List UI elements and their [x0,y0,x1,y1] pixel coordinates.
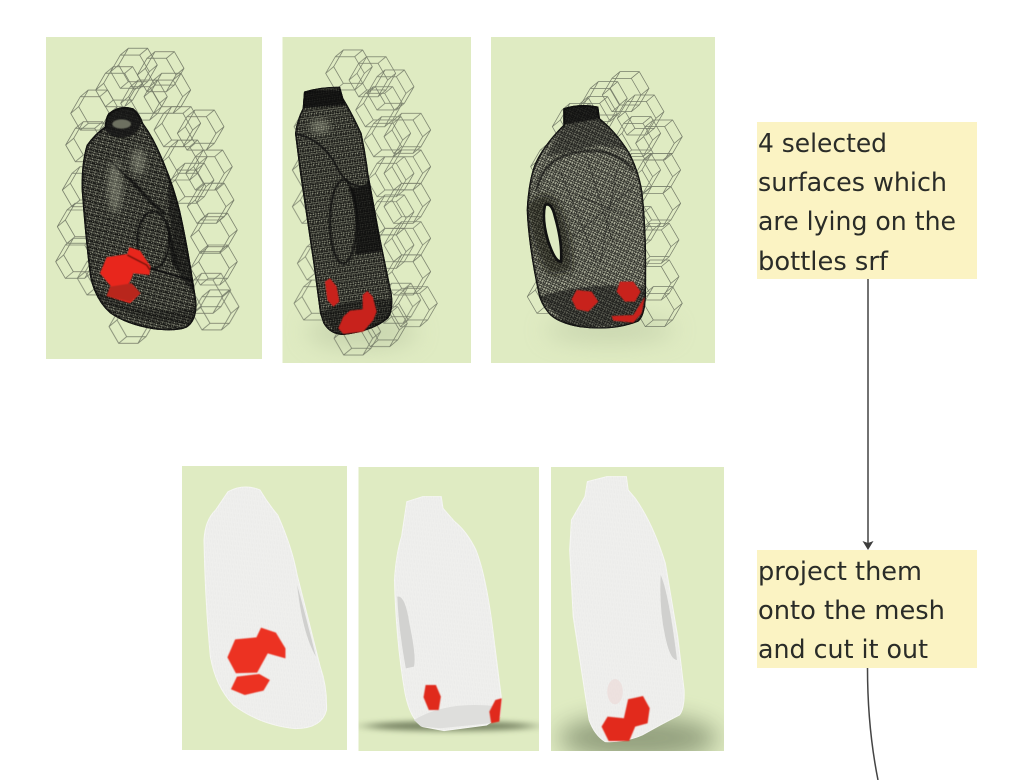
label: project and cut: and cut it out [758,635,928,665]
bottle 3 mesh [526,105,646,329]
wireframe: hexagon cells behind bottle 3 [527,72,682,327]
handle opening [544,204,561,262]
panel: cut mesh bottle, view 3 [551,467,724,760]
red selected surfaces, view 1 [100,247,151,303]
panel: cut mesh bottle, view 1 [182,466,347,750]
label: selected surfaces: are lying on the [758,207,956,237]
red cut-outs, view 2 [424,685,502,723]
red selected surfaces, view 3 [572,282,645,323]
label: project and cut: project them [758,557,922,587]
label: project and cut [757,550,977,668]
white mesh bottle 3 [570,477,684,742]
label: project and cut: onto the mesh [758,596,945,626]
bottle 1 mesh [82,107,197,330]
arrow: continuing downward [868,668,878,780]
panel: cut mesh bottle, view 2 [358,467,539,751]
wireframe: hexagon cells behind bottle 2 [292,50,437,355]
red cut-outs, view 1 [227,628,285,695]
label: selected surfaces: 4 selected [758,129,887,159]
label: selected surfaces: surfaces which [758,168,947,198]
bottle 2 mesh [295,86,392,335]
panel: wireframe bottle, view 2 [282,37,471,363]
wireframe: hexagon cells behind bottle 1 [56,48,239,343]
panel: wireframe bottle, view 3 [491,37,715,363]
arrow: selected surfaces to projection [862,279,874,550]
white mesh bottle 1 [204,487,327,729]
label: selected surfaces: bottles srf [758,247,889,277]
red selected surfaces, view 2 [325,278,377,334]
panel: wireframe bottle, view 1 [46,37,262,359]
red cut-out, view 3 [602,696,650,741]
label: selected surfaces [757,122,977,279]
white mesh bottle 2 [394,497,501,731]
